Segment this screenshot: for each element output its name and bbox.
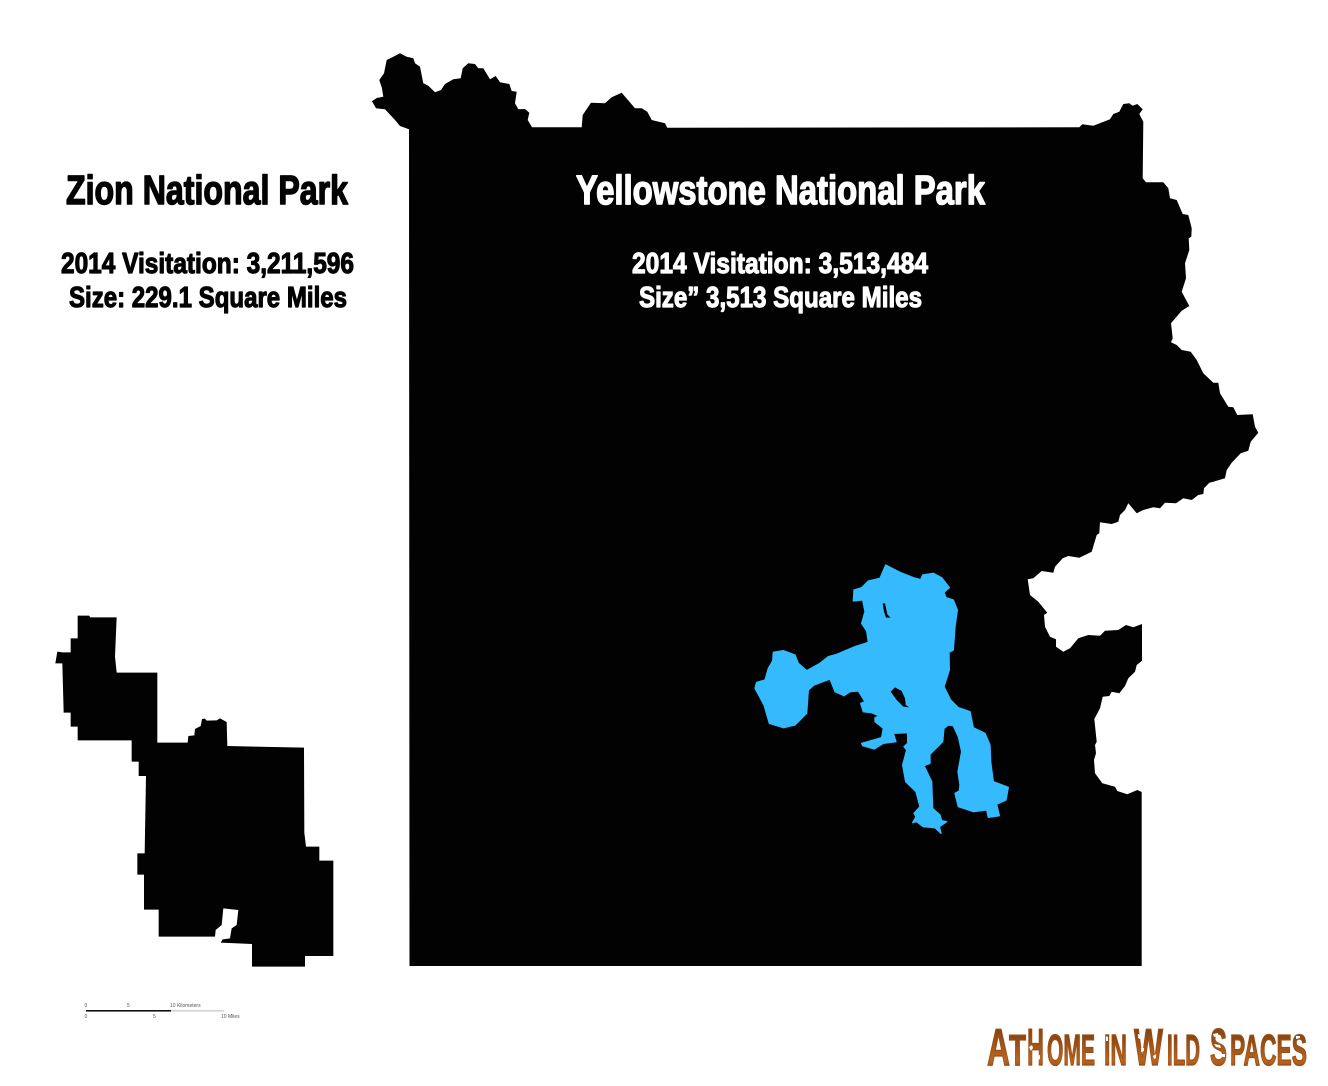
text block: Zion National Park bbox=[61, 167, 354, 314]
stat: Zion visitation: 2014 Visitation: 3,211,596 bbox=[61, 248, 354, 280]
logo: At Home in Wild Spaces: W bbox=[1134, 1019, 1164, 1077]
scale bar: 5 bbox=[127, 1003, 130, 1009]
logo: At Home in Wild Spaces: A bbox=[987, 1019, 1010, 1077]
map: Yellowstone Lake bbox=[755, 565, 1008, 833]
heading: Zion: Zion National Park bbox=[66, 167, 348, 213]
heading: Yellowstone: Yellowstone National Park bbox=[576, 167, 985, 213]
scale bar: 0 bbox=[84, 1003, 88, 1009]
logo: At Home in Wild Spaces: H bbox=[1027, 1019, 1044, 1077]
map: Zion National Park silhouette bbox=[55, 616, 333, 967]
map: Yellowstone National Park silhouette bbox=[372, 53, 1258, 966]
logo: At Home in Wild Spaces bbox=[987, 1019, 1307, 1077]
logo: At Home in Wild Spaces: OME bbox=[1047, 1026, 1095, 1075]
scale bar: 10 Kilometers bbox=[170, 1003, 201, 1009]
text block: Yellowstone National Park bbox=[576, 167, 985, 314]
scale bar: 0 bbox=[84, 1014, 88, 1020]
stat: Yellowstone visitation: 2014 Visitation: 3,513,484 bbox=[632, 248, 928, 280]
stat: Zion size: Size: 229.1 Square Miles bbox=[69, 282, 347, 314]
stat: Yellowstone size: Size” 3,513 Square Miles bbox=[639, 282, 922, 314]
scale bar: 10 Miles bbox=[221, 1014, 240, 1020]
scale bar bbox=[84, 1003, 240, 1020]
logo: At Home in Wild Spaces: ILD bbox=[1167, 1026, 1200, 1075]
logo: At Home in Wild Spaces: S bbox=[1210, 1019, 1227, 1077]
logo: At Home in Wild Spaces: IN bbox=[1104, 1026, 1127, 1075]
logo: At Home in Wild Spaces: T bbox=[1009, 1026, 1026, 1075]
scale bar: 5 bbox=[153, 1014, 156, 1020]
